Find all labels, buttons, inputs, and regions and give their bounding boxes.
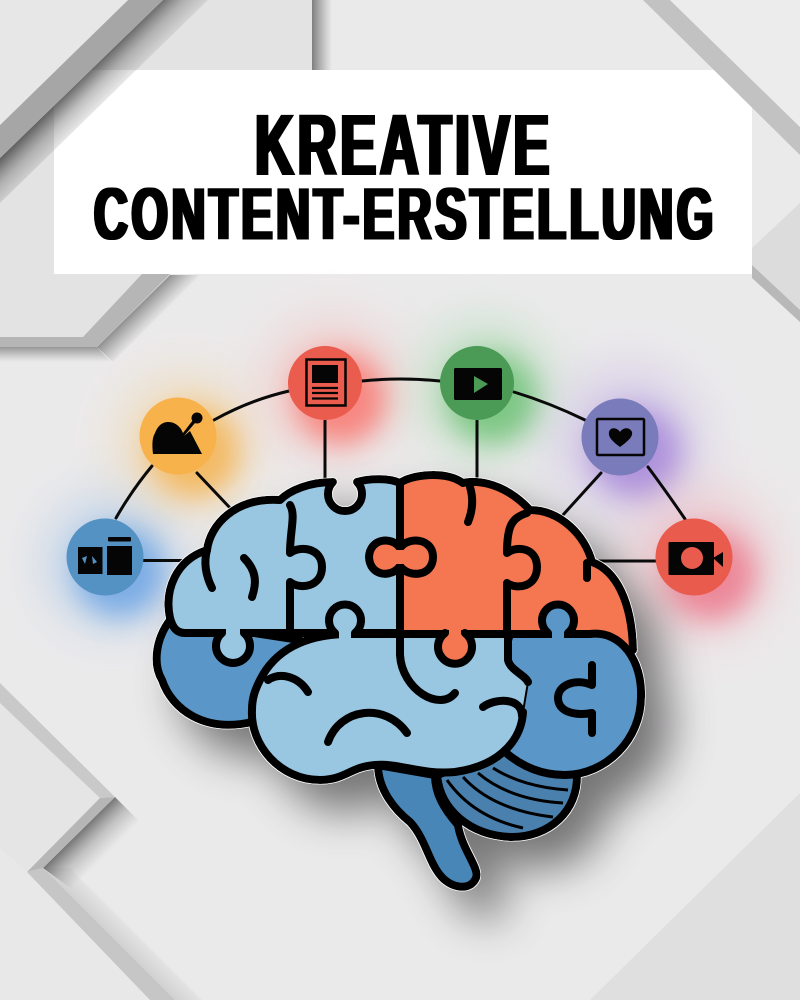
brain stem	[378, 765, 477, 887]
icon node: image / layout (blue)	[66, 518, 144, 596]
puzzle knobs	[216, 541, 574, 664]
coloured glows	[46, 322, 772, 634]
panel: bottom-right shape	[590, 793, 800, 1000]
title line 1: KREATIVE	[255, 97, 553, 194]
icon node: creative pen (yellow)	[140, 398, 216, 474]
left dark blue lobe	[157, 620, 300, 725]
title panel	[54, 70, 752, 274]
panel: top-left corner band	[0, 0, 208, 203]
connector lines	[116, 379, 685, 561]
cerebellum	[437, 750, 577, 837]
panel: bottom-left layered shape	[0, 683, 202, 1000]
internal brain contour lines	[205, 487, 592, 742]
lower light blue lobe	[252, 634, 528, 780]
icon node: video camera (red)	[656, 518, 732, 596]
icon node: article document (red)	[288, 346, 362, 420]
panel: top-left base shape	[0, 0, 332, 362]
title text	[94, 97, 717, 256]
icon node: heart in frame (purple)	[582, 398, 658, 476]
icon node: video play (green)	[440, 346, 514, 420]
panel: right side shape	[752, 203, 800, 322]
brain illustration	[157, 475, 641, 887]
upper-left light blue puzzle piece	[169, 479, 400, 633]
upper-right orange puzzle piece	[400, 475, 633, 650]
right dark blue lobe	[505, 634, 641, 775]
panel: top-right corner band	[643, 0, 800, 155]
